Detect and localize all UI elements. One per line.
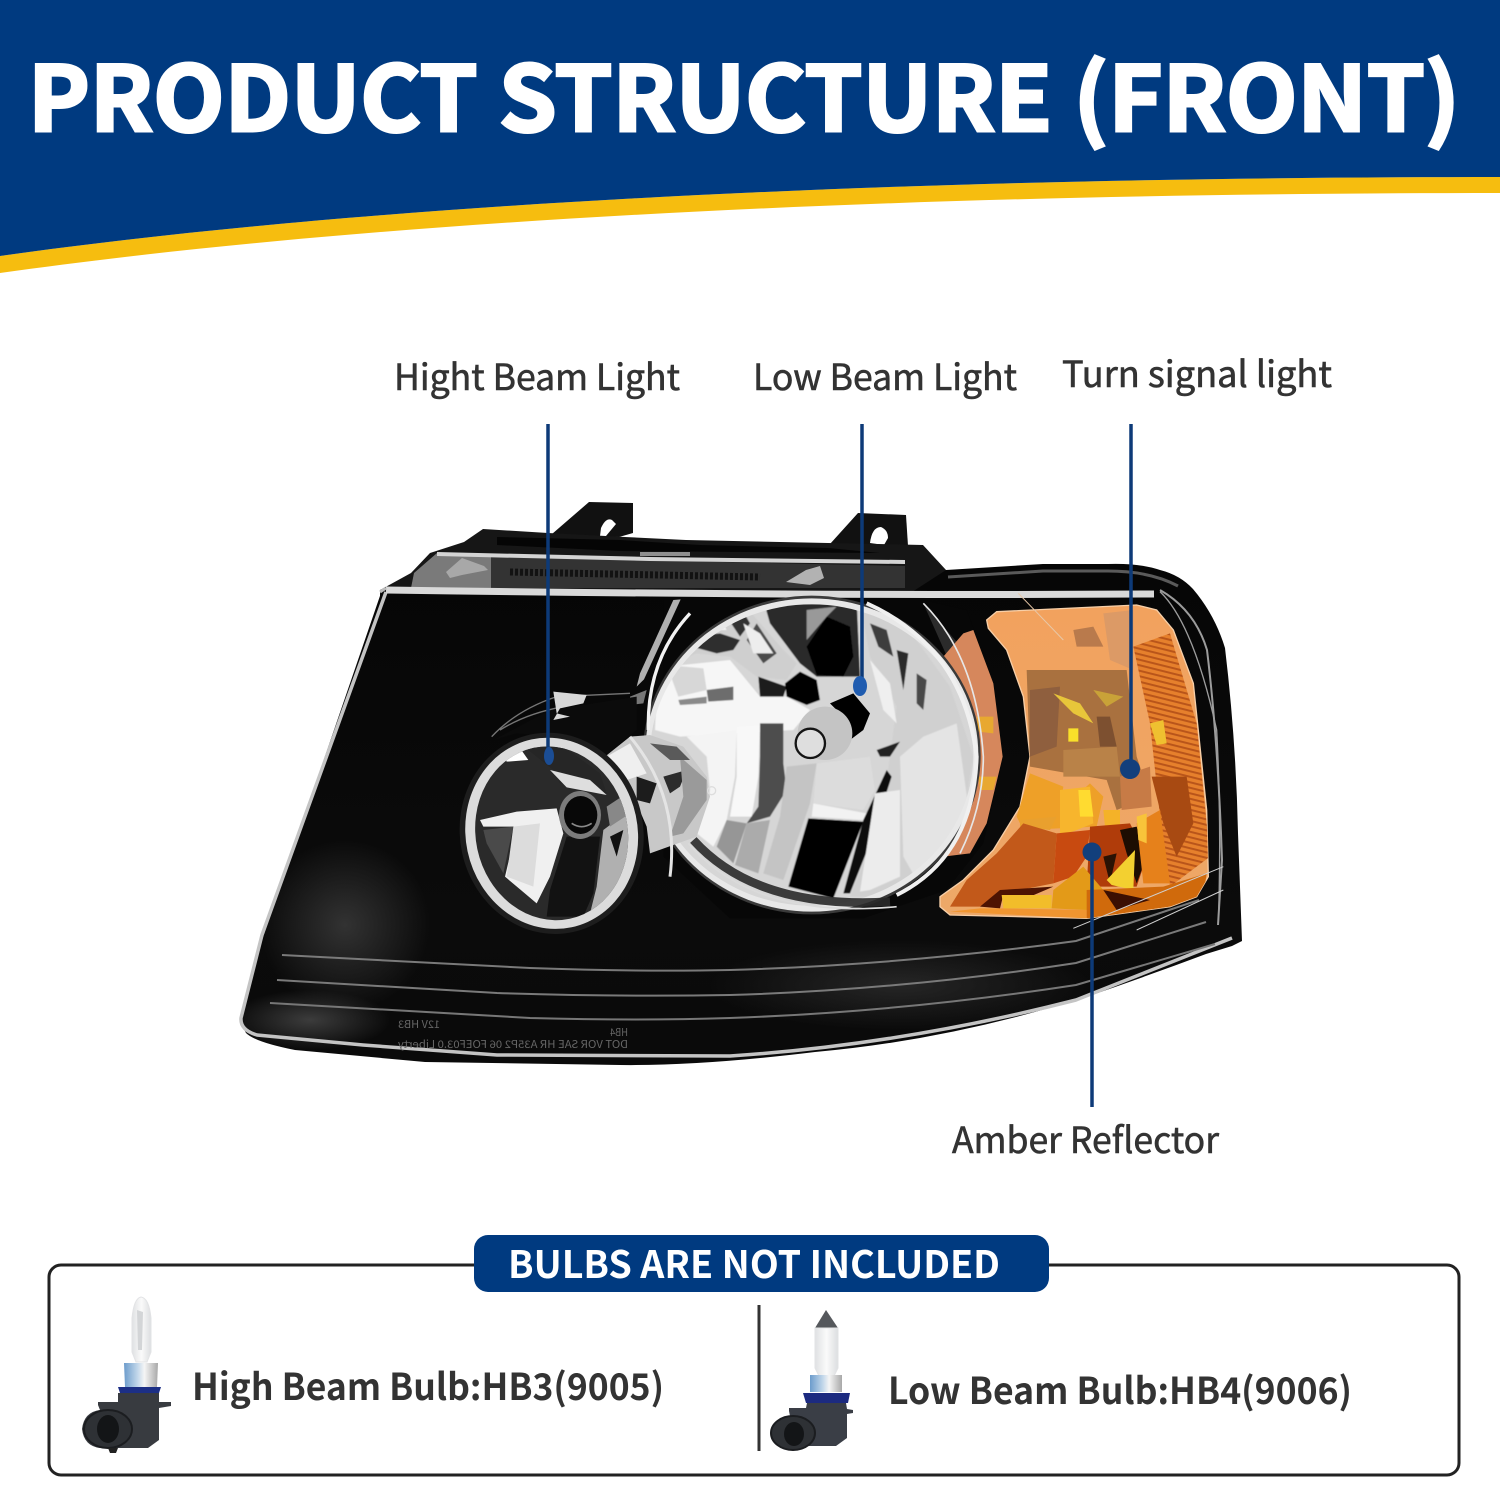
reflector lower rim shadow — [693, 840, 890, 903]
projector neck — [605, 735, 710, 853]
text: high beam bulb: High Beam Bulb:HB3(9005) — [192, 1357, 664, 1411]
moulded DOT marking — [397, 1017, 628, 1052]
navy header band — [0, 0, 1500, 256]
housing top plate — [380, 529, 960, 600]
lamp body — [240, 564, 1242, 1065]
projector facets — [480, 746, 628, 917]
label: high beam: Hight Beam Light — [394, 349, 680, 401]
heading pill: BULBS ARE NOT INCLUDED — [508, 1234, 1000, 1289]
amber lower left — [1017, 773, 1103, 830]
label: amber reflector: Amber Reflector — [952, 1112, 1220, 1164]
amber right hatch — [1133, 633, 1210, 887]
lower lens ridges — [282, 900, 1199, 971]
right housing highlight — [1160, 590, 1222, 925]
amber bottom band — [980, 887, 1053, 908]
amber sliver — [943, 630, 1003, 857]
mounting bracket right — [830, 513, 908, 546]
header banner — [0, 0, 1500, 273]
label: turn signal: Turn signal light — [1062, 346, 1332, 398]
moulded DOT marking: 12V HB3 — [398, 1017, 440, 1032]
soft grey reflections on black lens — [230, 840, 1090, 1050]
label: low beam: Low Beam Light — [753, 349, 1017, 401]
title: PRODUCT STRUCTURE (FRONT) — [28, 27, 1460, 157]
mounting screws — [446, 558, 488, 578]
amber turn signal lens — [940, 592, 1223, 930]
main reflector — [630, 590, 1003, 923]
hood above projector — [493, 697, 637, 757]
projector reflector — [460, 692, 716, 934]
lens outer edge chrome — [241, 592, 1232, 1056]
icon: low beam bulb — [771, 1310, 853, 1450]
mounting bracket left — [552, 502, 633, 537]
reflector facets right — [850, 603, 973, 897]
chrome top trim — [386, 590, 1154, 594]
panel border — [49, 1265, 1459, 1475]
leader: turn signal — [1120, 424, 1140, 779]
reflector ring highlight — [867, 603, 977, 895]
amber mid mottling — [1027, 670, 1150, 810]
main bulb socket — [830, 693, 870, 740]
reflector facets top centre — [763, 600, 860, 677]
leader: low beam — [853, 424, 867, 696]
amber lens top mottling — [1073, 627, 1103, 647]
right bezel chrome lines — [1160, 592, 1220, 923]
headlight illustration — [230, 502, 1242, 1065]
reflector facets upper left — [663, 600, 797, 680]
moulded DOT marking: DOT VOR SAE HR A35P2 06 FOEF03.0 Liberty — [397, 1037, 628, 1052]
text: low beam bulb: Low Beam Bulb:HB4(9006) — [888, 1361, 1352, 1415]
projector bulb hole — [559, 791, 601, 839]
bulbs panel — [49, 1234, 1459, 1475]
reflector surround — [663, 600, 1003, 918]
yellow curved stripe — [0, 177, 1500, 273]
leader: high beam — [544, 424, 554, 765]
reflector facets lower centre — [813, 757, 875, 810]
moulded DOT marking: HB4 — [610, 1025, 628, 1040]
moulded housing texture — [510, 572, 760, 577]
center divider — [758, 1305, 760, 1451]
leader: amber reflector — [1082, 842, 1102, 1107]
icon: high beam bulb — [82, 1297, 171, 1453]
